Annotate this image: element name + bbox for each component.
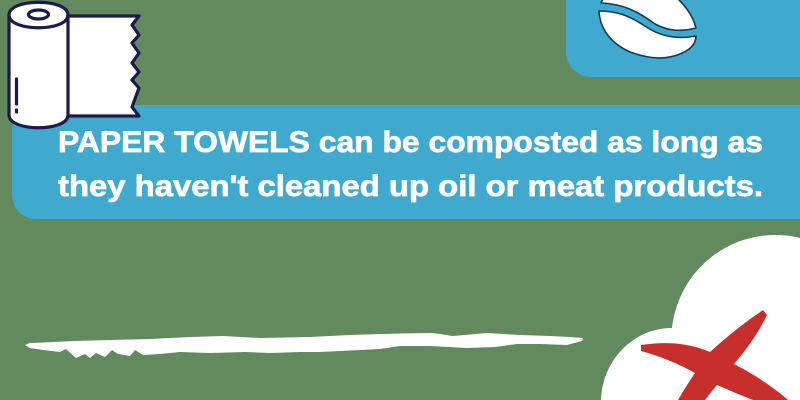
roll top rim (9, 15, 68, 28)
panel: main blue message band (12, 105, 800, 219)
text line 2: they haven't cleaned up oil or meat products. (58, 170, 763, 203)
roll core (28, 10, 48, 19)
icon: paper towel roll (9, 2, 139, 128)
icon: coffee bean (599, 0, 696, 58)
brush stroke divider (25, 333, 583, 358)
icon: red cross mark (641, 310, 788, 400)
roll highlight (15, 79, 18, 112)
roll body (9, 2, 68, 128)
message text (58, 126, 763, 203)
icon: white cloud (601, 235, 800, 400)
panel: top right blue tab (566, 0, 800, 77)
towel sheet (66, 16, 139, 116)
text line 1: PAPER TOWELS can be composted as long as (58, 126, 763, 159)
